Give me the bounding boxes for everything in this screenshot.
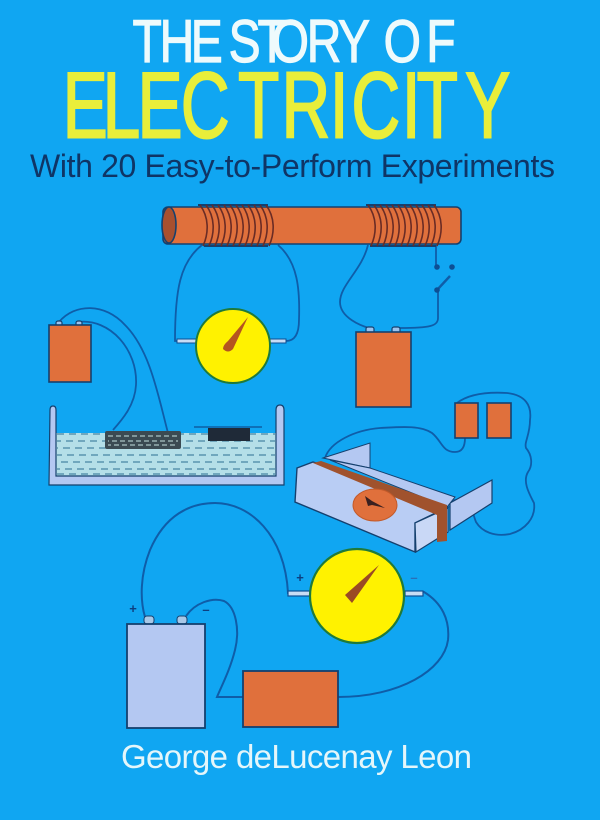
iron rod (163, 207, 461, 244)
wires (175, 245, 450, 341)
rod end (162, 207, 176, 243)
meter needle (345, 565, 379, 603)
resistor (243, 671, 338, 727)
box top (295, 462, 448, 552)
experiment: coil rod with meter and battery (162, 205, 461, 407)
cells (455, 403, 511, 438)
box front (415, 508, 448, 552)
floating plate right (208, 428, 250, 441)
experiment: compass in wooden box (295, 393, 534, 552)
author: George deLucenay Leon (121, 738, 472, 775)
compass needle (365, 496, 385, 508)
experiment: meter, battery and resistor (127, 503, 448, 728)
water (55, 433, 277, 477)
meter dial (310, 549, 404, 643)
wires (325, 393, 534, 535)
meter needle (223, 317, 248, 352)
surface line (194, 426, 262, 428)
right flap (450, 480, 492, 530)
back surface (330, 460, 455, 507)
minus label meter: – (410, 570, 418, 585)
title: Electricity: ELECTRICITY (63, 54, 510, 158)
metal plate left (105, 431, 181, 449)
battery terminals (56, 321, 82, 326)
coil right (366, 205, 441, 246)
tank (49, 405, 284, 485)
compass disc (353, 489, 397, 521)
battery (356, 332, 411, 407)
meter terminals (177, 339, 286, 343)
battery terminals (366, 327, 400, 333)
back flap (323, 443, 370, 468)
title: The Story of: THE STORY OF (132, 8, 456, 75)
water ripples (57, 434, 275, 474)
subtitle: With 20 Easy-to-Perform Experiments (30, 148, 555, 184)
battery (127, 624, 205, 728)
icon: switch contacts (434, 264, 455, 293)
minus label left: – (202, 602, 210, 617)
wire wrap (313, 461, 447, 542)
battery (49, 325, 91, 382)
battery terminals (144, 616, 187, 624)
coil left (198, 205, 273, 246)
wires (142, 503, 448, 697)
experiment: water tank with battery (49, 308, 284, 485)
plus label meter: + (296, 570, 304, 585)
wires (59, 308, 168, 433)
meter terminals (288, 591, 423, 596)
plate texture (108, 436, 178, 445)
meter dial (196, 309, 270, 383)
plus label left: + (129, 601, 137, 616)
